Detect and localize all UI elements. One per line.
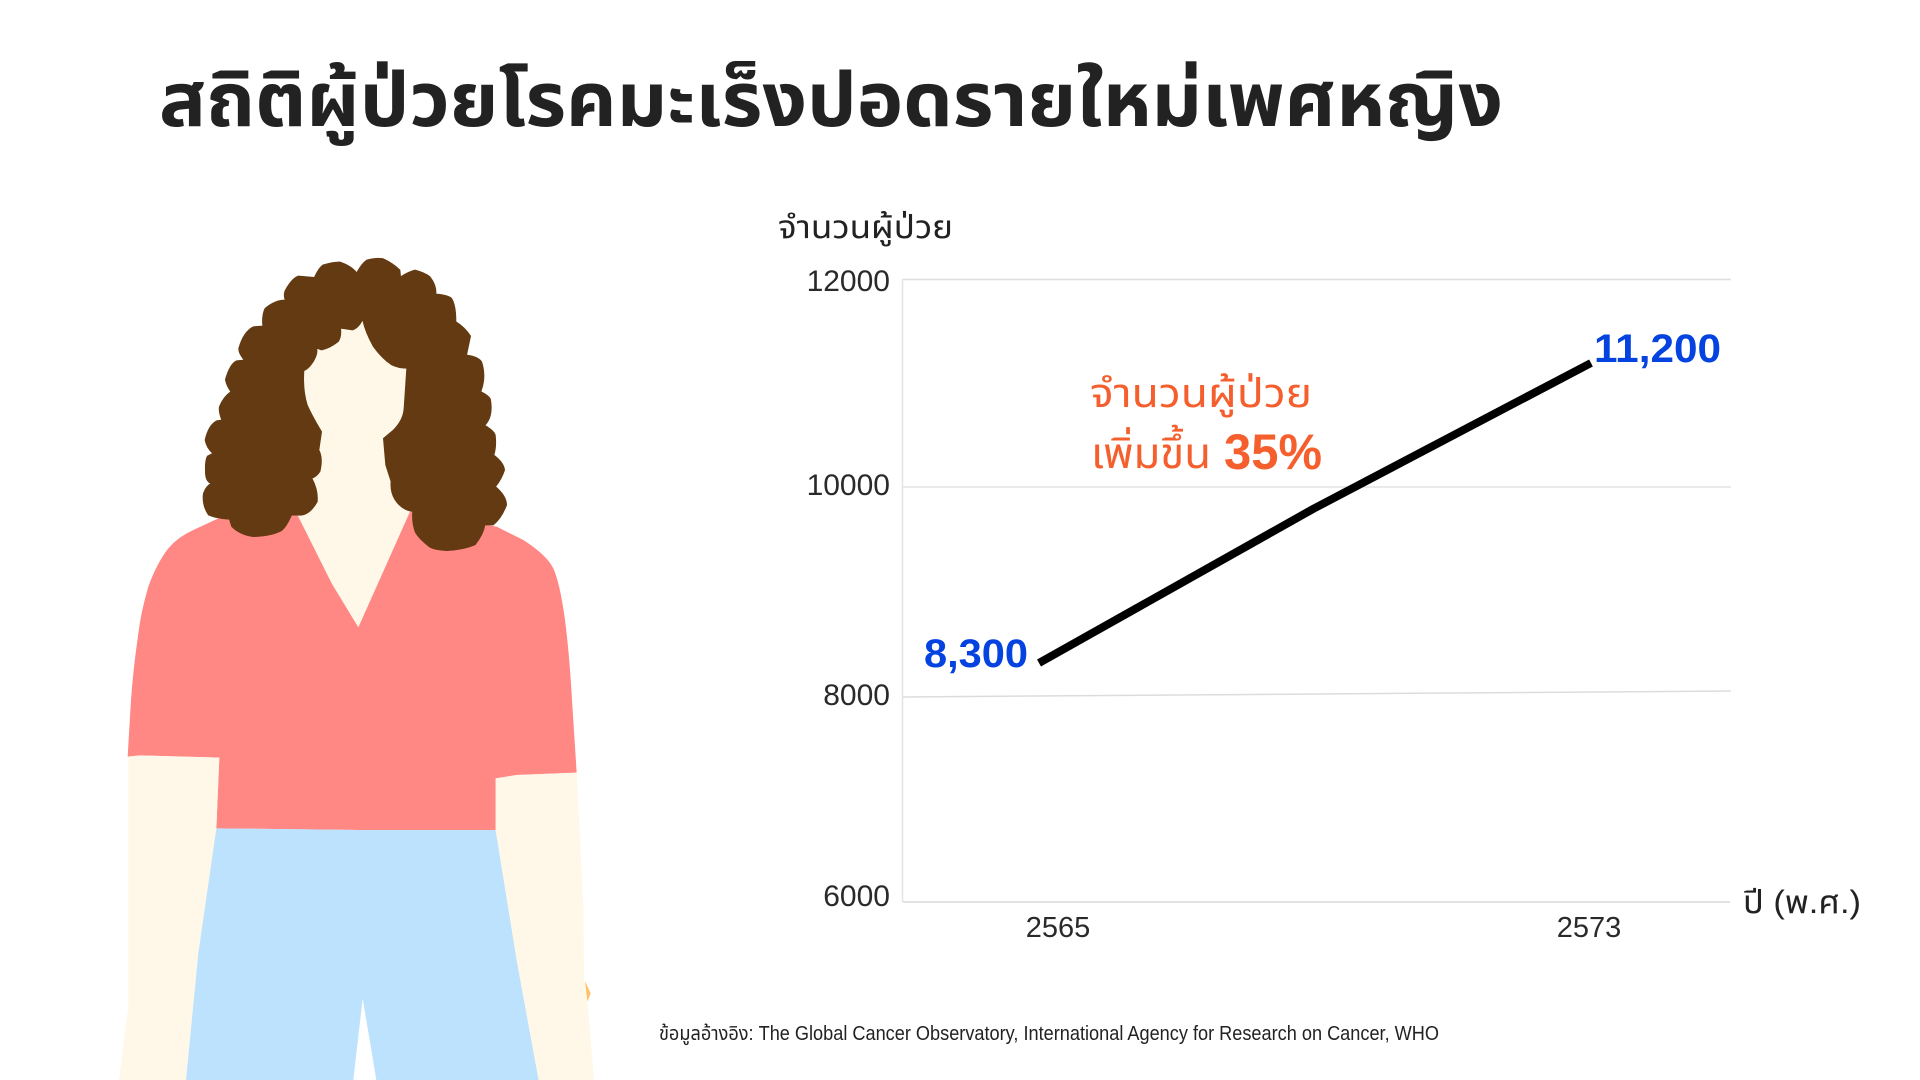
- y axis tick labels: 12000: [807, 265, 890, 298]
- callout: 35%: [1224, 424, 1322, 480]
- right arm: [496, 773, 594, 1080]
- value label 11,200: 11,200: [1594, 327, 1721, 371]
- callout: [1090, 372, 1322, 480]
- y axis tick labels: 8000: [823, 679, 890, 712]
- title: สถิติผู้ป่วยโรคมะเร็งปอดรายใหม่เพศหญิง: [159, 58, 1503, 146]
- skin: face and neck: [297, 317, 410, 627]
- callout: จำนวนผู้ป่วย: [1090, 372, 1312, 417]
- y axis tick labels: 6000: [823, 880, 890, 913]
- line chart: [778, 209, 1861, 944]
- y axis title: จำนวนผู้ป่วย: [778, 209, 953, 247]
- x axis tick labels: [1026, 912, 1621, 944]
- y axis tick labels: 10000: [807, 469, 890, 502]
- x axis tick labels: 2565: [1026, 912, 1090, 944]
- value label 8,300: 8,300: [924, 632, 1028, 676]
- hair: [203, 258, 507, 551]
- x axis title: ปี (พ.ศ.): [1743, 884, 1861, 920]
- callout: เพิ่มขึ้น: [1091, 424, 1211, 478]
- data line: [1039, 363, 1591, 663]
- shirt: [128, 512, 577, 830]
- x axis tick labels: 2573: [1557, 912, 1621, 944]
- source note: ข้อมูลอ้างอิง: The Global Cancer Observatory, International Agency for Research on Cancer, WHO: [659, 1022, 1439, 1046]
- left arm: [119, 755, 219, 1080]
- y axis line: [902, 279, 904, 902]
- shorts: [186, 828, 539, 1080]
- y axis tick labels: [807, 265, 890, 913]
- illustration: woman: [119, 258, 594, 1080]
- watch: [585, 981, 591, 1002]
